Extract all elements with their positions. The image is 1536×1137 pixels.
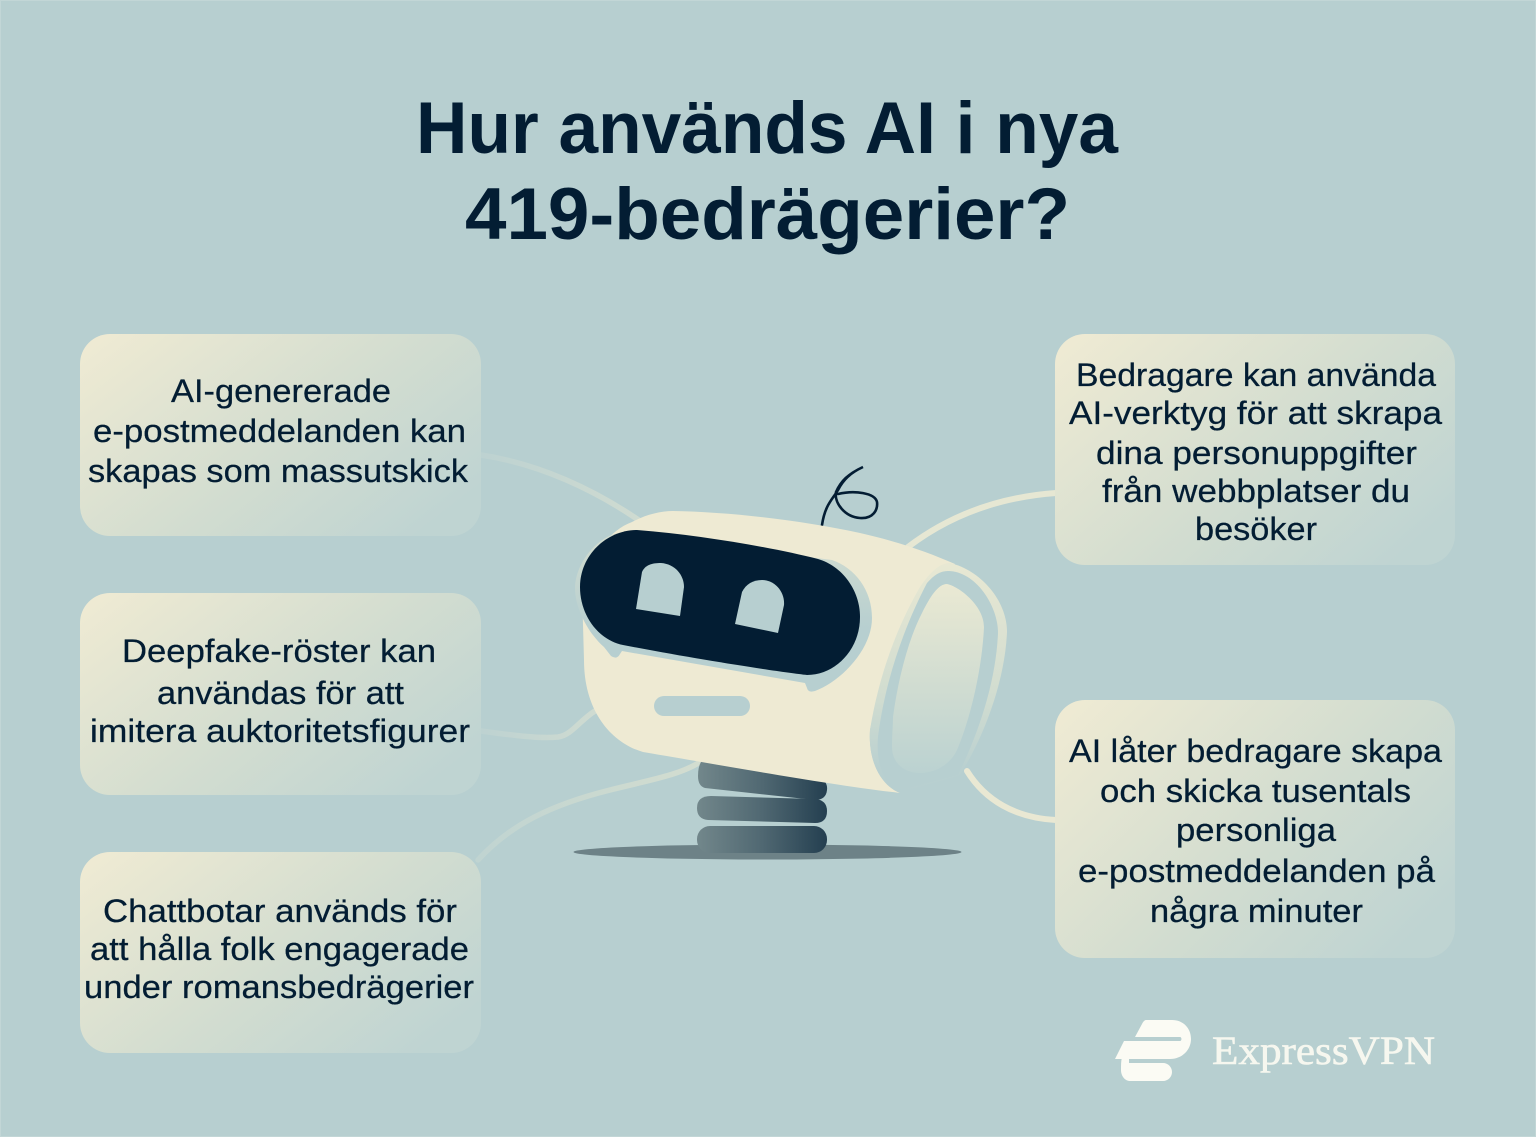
panel: thousands of personal emails: personliga bbox=[1176, 812, 1336, 848]
spring bbox=[697, 758, 827, 853]
logo: ExpressVPN bbox=[1115, 1020, 1435, 1081]
panel: AI-generated emails bbox=[80, 334, 481, 536]
panel: chatbots: under romansbedrägerier bbox=[84, 969, 474, 1005]
panel: scraping personal data: från webbplatser du bbox=[1102, 473, 1410, 509]
rear ring inner bbox=[892, 584, 984, 773]
panel: scraping personal data: Bedragare kan använda bbox=[1076, 357, 1436, 393]
panel: scraping personal data: dina personuppgifter bbox=[1096, 435, 1417, 471]
panel: AI-generated emails: AI-genererade bbox=[171, 373, 391, 409]
mouth bbox=[654, 696, 750, 716]
head body bbox=[582, 511, 955, 793]
title bbox=[416, 88, 1119, 255]
title: Hur används AI i nya bbox=[416, 88, 1119, 169]
panel: deepfake voices bbox=[80, 593, 481, 795]
panel: thousands of personal emails: e-postmeddelanden på bbox=[1078, 853, 1435, 889]
panel: chatbots bbox=[80, 852, 481, 1053]
panel: thousands of personal emails bbox=[1055, 700, 1455, 958]
antenna bbox=[822, 467, 877, 525]
rear ring outer bbox=[870, 563, 1007, 793]
robot illustration bbox=[574, 467, 1007, 860]
visor bbox=[580, 530, 860, 675]
rear ring band bbox=[878, 571, 998, 791]
left eye bbox=[636, 563, 684, 616]
panel: scraping personal data bbox=[1055, 334, 1455, 565]
panel: AI-generated emails: skapas som massutskick bbox=[88, 453, 469, 489]
panel: thousands of personal emails: och skicka tusentals bbox=[1100, 773, 1411, 809]
panel: thousands of personal emails: AI låter bedragare skapa bbox=[1069, 733, 1442, 769]
right eye bbox=[735, 580, 784, 633]
panel: AI-generated emails: e-postmeddelanden kan bbox=[93, 413, 466, 449]
panel: deepfake voices: imitera auktoritetsfigurer bbox=[90, 713, 470, 749]
visor shadow bbox=[575, 533, 872, 692]
panel: scraping personal data: AI-verktyg för att skrapa bbox=[1069, 395, 1442, 431]
title: 419-bedrägerier? bbox=[465, 174, 1070, 255]
panel: chatbots: Chattbotar används för bbox=[103, 893, 457, 929]
panel: scraping personal data: besöker bbox=[1195, 511, 1317, 547]
logo wordmark: ExpressVPN bbox=[1212, 1028, 1435, 1073]
panel: chatbots: att hålla folk engagerade bbox=[90, 931, 469, 967]
connector lines bbox=[478, 455, 1056, 860]
panel: deepfake voices: användas för att bbox=[157, 675, 404, 711]
logo icon bbox=[1115, 1020, 1191, 1081]
ground shadow bbox=[574, 844, 962, 860]
panel: thousands of personal emails: några minuter bbox=[1150, 893, 1363, 929]
panel: deepfake voices: Deepfake-röster kan bbox=[122, 633, 436, 669]
